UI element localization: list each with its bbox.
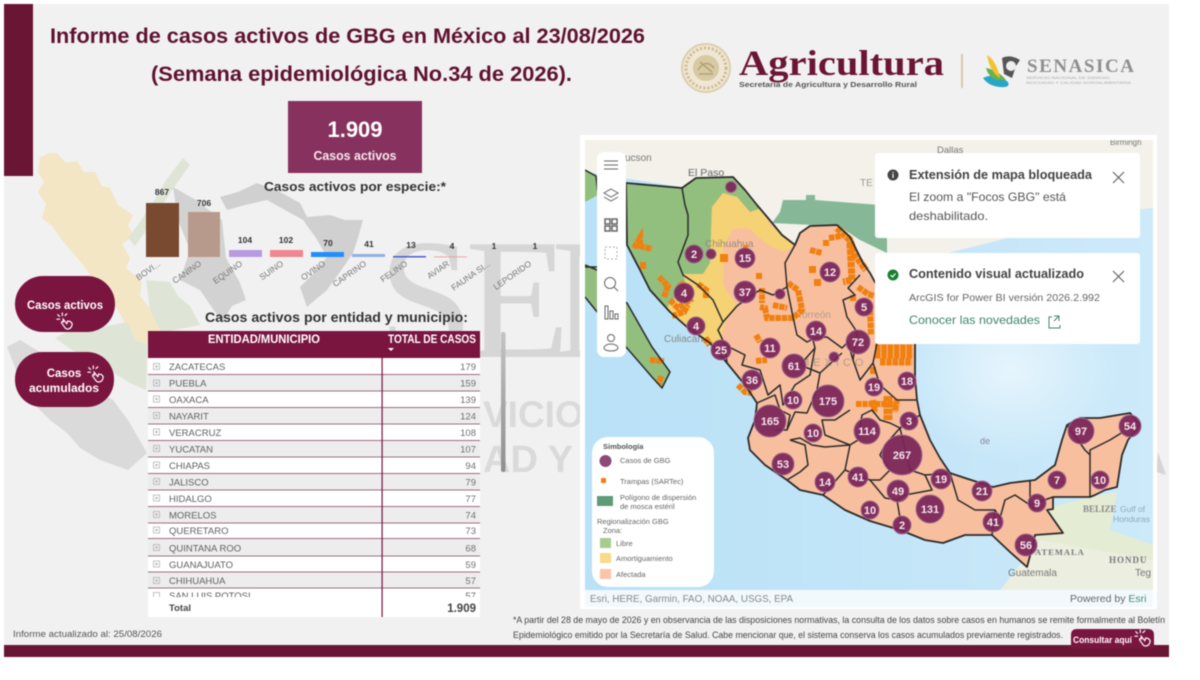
footnote (513, 615, 1165, 641)
button: casos acumulados: acumulados (29, 383, 99, 395)
bar chart: casos por especie: 867 (155, 187, 169, 197)
bottom bar (4, 645, 1169, 657)
bar chart: casos por especie: 706 (197, 198, 211, 208)
map legend: Zona: (603, 526, 622, 535)
notification: contenido actualizado: Contenido visual actualizado (909, 267, 1084, 281)
map legend: Libre (616, 539, 633, 548)
table: casos por entidad y municipio: TOTAL DE CASOS (388, 334, 476, 346)
case clusters: 19 (868, 382, 880, 394)
button: consultar aqui (1071, 629, 1154, 648)
map place labels: HONDU (1109, 555, 1148, 565)
table: casos por entidad y municipio: ZACATECAS (169, 362, 225, 373)
bar chart: casos por especie: 41 (364, 239, 374, 249)
case clusters: 4 (681, 288, 688, 300)
map place labels: Gulf of (1120, 504, 1146, 514)
logo: SENASICA: SENASICA (1027, 56, 1134, 77)
notification: contenido actualizado (875, 253, 1140, 344)
map place labels: TE (860, 178, 873, 189)
map place labels: Honduras (1113, 514, 1150, 524)
logo: Agricultura: Agricultura (739, 43, 944, 83)
table: casos por entidad y municipio: MORELOS (169, 510, 217, 522)
bar chart: casos por especie: 104 (238, 235, 252, 245)
case clusters: 41 (987, 517, 999, 529)
bar chart: casos por especie: AVIAR (425, 258, 451, 281)
map place labels: Guatemala (1008, 568, 1057, 579)
table: casos por entidad y municipio: JALISCO (169, 478, 209, 488)
case clusters: 10 (1094, 475, 1106, 487)
bar chart: casos por especie: BOVI... (134, 258, 162, 282)
case clusters: 11 (764, 343, 776, 355)
case clusters: 10 (807, 428, 819, 440)
case clusters: 36 (746, 375, 758, 387)
update date: Informe actualizado al: 25/08/2026 (13, 629, 162, 639)
map attribution (585, 590, 1153, 607)
logo: Agricultura (682, 43, 944, 92)
table: casos por entidad y municipio: 107 (460, 444, 476, 456)
map legend: Amortiguamiento (616, 554, 673, 563)
bar chart: casos por especie: EQUINO (211, 258, 244, 286)
trap markers (634, 228, 913, 420)
case clusters: 114 (858, 426, 877, 438)
watermark: SENASICA emblem and letters: SEN (378, 205, 675, 395)
table: casos por entidad y municipio: 139 (460, 395, 476, 406)
map place labels: Birmingh (1110, 138, 1142, 147)
button: casos acumulados: Casos (47, 368, 81, 380)
notification: extensión bloqueada: El zoom a "Focos GBG" está (909, 190, 1066, 204)
logo: SENASICA: INOCUIDAD Y CALIDAD AGROALIMENTARIA (1026, 81, 1132, 85)
case clusters: 2 (691, 249, 697, 261)
case clusters: 97 (1075, 426, 1087, 438)
bar chart: casos por especie: 102 (279, 235, 293, 245)
KPI card: casos activos: 1.909 (327, 117, 383, 142)
case clusters: 54 (1124, 421, 1137, 433)
table: casos por entidad y municipio: Total (169, 603, 191, 614)
footnote: Epidemiológico emitido por la Secretaría de Salud. Cabe mencionar que, el sistema conserva los casos acumulados previamente registrados. (513, 630, 1063, 641)
table: casos por entidad y municipio: 108 (460, 428, 476, 439)
map legend: Trampas (SARTec) (620, 477, 684, 486)
case clusters: 14 (810, 326, 823, 338)
case clusters: 12 (824, 267, 836, 279)
table: casos por entidad y municipio: QUINTANA ROO (169, 544, 241, 554)
case clusters: 37 (739, 287, 751, 299)
case clusters: 7 (1054, 475, 1060, 487)
bar chart: casos por especie: 1 (492, 241, 497, 251)
watermark: SENASICA emblem and letters (7, 152, 580, 472)
watermark: SENASICA emblem and letters: AD Y (483, 439, 573, 481)
table: casos por entidad y municipio: 68 (465, 544, 476, 554)
table: casos por entidad y municipio: 57 (465, 576, 476, 587)
table: casos por entidad y municipio: 79 (465, 478, 476, 488)
map place labels: Teg (1135, 568, 1151, 579)
button: casos activos: Casos activos (27, 300, 103, 312)
map place labels: Dallas (937, 145, 964, 156)
map place labels: Chihuahua (705, 239, 754, 250)
bar chart: casos por especie: SUINO (257, 258, 285, 282)
map legend: Polígono de dispersión (620, 493, 696, 502)
map place labels: MEXICO (800, 357, 867, 369)
title: (Semana epidemiológica No.34 de 2026). (151, 63, 572, 86)
watermark fragment right of map (1156, 452, 1166, 475)
notification: extensión bloqueada: Extensión de mapa bloqueada (909, 168, 1093, 182)
case clusters: 5 (861, 302, 867, 314)
table: casos por entidad y municipio: 179 (460, 362, 476, 373)
map attribution: Powered by Esri (1070, 593, 1146, 605)
title (50, 25, 645, 86)
case clusters: 18 (901, 376, 913, 388)
map legend: de mosca estéril (620, 502, 675, 511)
table: casos por entidad y municipio: SAN LUIS POTOSI (169, 591, 251, 602)
heading: casos por especie: Casos activos por especie:* (264, 179, 447, 194)
bar chart: casos por especie: CAPRINO (331, 258, 368, 289)
left accent bar (4, 4, 33, 176)
KPI card: casos activos (288, 101, 422, 173)
table: casos por entidad y municipio: 159 (460, 378, 476, 390)
table: casos por entidad y municipio: HIDALGO (169, 494, 212, 505)
button: casos activos (15, 276, 115, 332)
case clusters: 3 (906, 416, 912, 428)
bar chart: casos por especie: FAUNA SI... (449, 258, 492, 293)
notification: extensión bloqueada: deshabilitado. (909, 209, 988, 223)
table: casos por entidad y municipio: QUERETARO (169, 526, 228, 537)
map legend (592, 437, 714, 587)
case clusters: 165 (761, 416, 779, 428)
table: casos por entidad y municipio: ENTIDAD/MUNICIPIO (208, 334, 320, 346)
bar chart: casos por especie: LEPORIDO (491, 258, 533, 292)
table: casos por entidad y municipio: 73 (465, 526, 476, 537)
footnote: *A partir del 28 de mayo de 2026 y en observancia de las disposiciones normativas, la consulta de los datos sobre casos en humanos se remite formalmente al Boletín (513, 615, 1165, 626)
bar chart: casos por especie: OVINO (299, 258, 327, 282)
table: casos por entidad y municipio: PUEBLA (169, 378, 207, 390)
table: casos por entidad y municipio: OAXACA (169, 395, 209, 406)
map legend: Regionalización GBG (597, 517, 669, 526)
case clusters: 72 (852, 337, 864, 349)
map panel (580, 135, 1157, 609)
table: casos por entidad y municipio: 74 (465, 510, 476, 522)
map legend: Afectada (616, 570, 646, 579)
bar chart: casos por especie: 70 (323, 238, 333, 248)
case clusters (674, 182, 1141, 556)
case clusters: 14 (819, 477, 832, 489)
table: casos por entidad y municipio: VERACRUZ (169, 428, 221, 439)
heading: casos por entidad: Casos activos por entidad y municipio: (205, 310, 468, 325)
logo: SENASICA (983, 55, 1134, 87)
logo divider (961, 54, 963, 88)
title: Informe de casos activos de GBG en México al 23/08/2026 (50, 25, 645, 48)
watermark: SENASICA emblem and letters: VICIO (483, 394, 584, 435)
logo: SENASICA: SERVICIO NACIONAL DE SANIDAD, (1026, 76, 1111, 80)
map place labels: El Paso (688, 167, 724, 179)
button: casos acumulados (15, 352, 114, 407)
bar chart: casos por especie: FELINO (378, 258, 409, 284)
logo: Agricultura: Secretaría de Agricultura y Desarrollo Rural (739, 80, 917, 89)
case clusters: 267 (893, 450, 911, 462)
bar chart: casos por especie (134, 187, 538, 293)
case clusters: 9 (1034, 498, 1040, 510)
map attribution: Esri, HERE, Garmin, FAO, NOAA, USGS, EPA (590, 593, 793, 605)
case clusters: 61 (788, 361, 800, 373)
map legend: Casos de GBG (620, 456, 671, 465)
bar chart: casos por especie: CANINO (170, 258, 203, 286)
case clusters: 175 (819, 396, 837, 408)
map place labels: Culiacán (664, 334, 703, 345)
case clusters: 19 (935, 474, 947, 486)
table: casos por entidad y municipio: YUCATAN (169, 444, 213, 456)
map place labels (625, 138, 1151, 579)
table: casos por entidad y municipio: 57 (465, 591, 476, 602)
table: casos por entidad y municipio: 77 (465, 494, 476, 505)
button: consultar aqui: Consultar aquí (1073, 635, 1132, 646)
notification: extensión bloqueada (875, 153, 1140, 238)
map toolbar (597, 152, 626, 357)
case clusters: 2 (899, 520, 905, 532)
table: casos por entidad y municipio: 1.909 (447, 603, 476, 615)
map place labels: ATEMALA (1035, 547, 1085, 557)
map place labels: ucson (625, 153, 652, 164)
map place labels: BELIZE (1083, 504, 1117, 514)
case clusters: 53 (777, 459, 789, 471)
bar chart: casos por especie: 1 (533, 241, 538, 251)
table: casos por entidad y municipio: 59 (465, 560, 476, 571)
map place labels: de (980, 436, 990, 446)
case clusters: 4 (693, 321, 700, 333)
table: casos por entidad y municipio: NAYARIT (169, 412, 209, 422)
table: casos por entidad y municipio: 124 (460, 412, 476, 422)
case clusters: 56 (1020, 540, 1032, 552)
table: casos por entidad y municipio: CHIAPAS (169, 461, 210, 472)
table: casos por entidad y municipio: 94 (465, 461, 476, 472)
table: casos por entidad y municipio: CHIHUAHUA (169, 576, 226, 587)
case clusters: 21 (976, 486, 988, 498)
map legend: Simbología (603, 442, 644, 451)
notification: contenido actualizado: ArcGIS for Power BI versión 2026.2.992 (909, 292, 1100, 304)
case clusters: 49 (892, 486, 904, 498)
case clusters: 25 (715, 345, 727, 357)
bar chart: casos por especie: 4 (450, 241, 455, 251)
bar chart: casos por especie: 13 (406, 240, 416, 250)
case clusters: 15 (739, 253, 751, 265)
case clusters: 41 (852, 472, 864, 484)
case clusters: 10 (864, 505, 876, 517)
table: casos por entidad y municipio (148, 331, 480, 617)
case clusters: 10 (787, 395, 799, 407)
KPI card: casos activos: Casos activos (314, 149, 397, 163)
notification: contenido actualizado: Conocer las novedades (909, 313, 1040, 327)
state borders (585, 170, 1140, 567)
map place labels: Torreón (797, 310, 831, 321)
case clusters: 131 (921, 504, 939, 516)
table: casos por entidad y municipio: GUANAJUATO (169, 560, 233, 571)
map base: sea and land (585, 140, 1153, 590)
